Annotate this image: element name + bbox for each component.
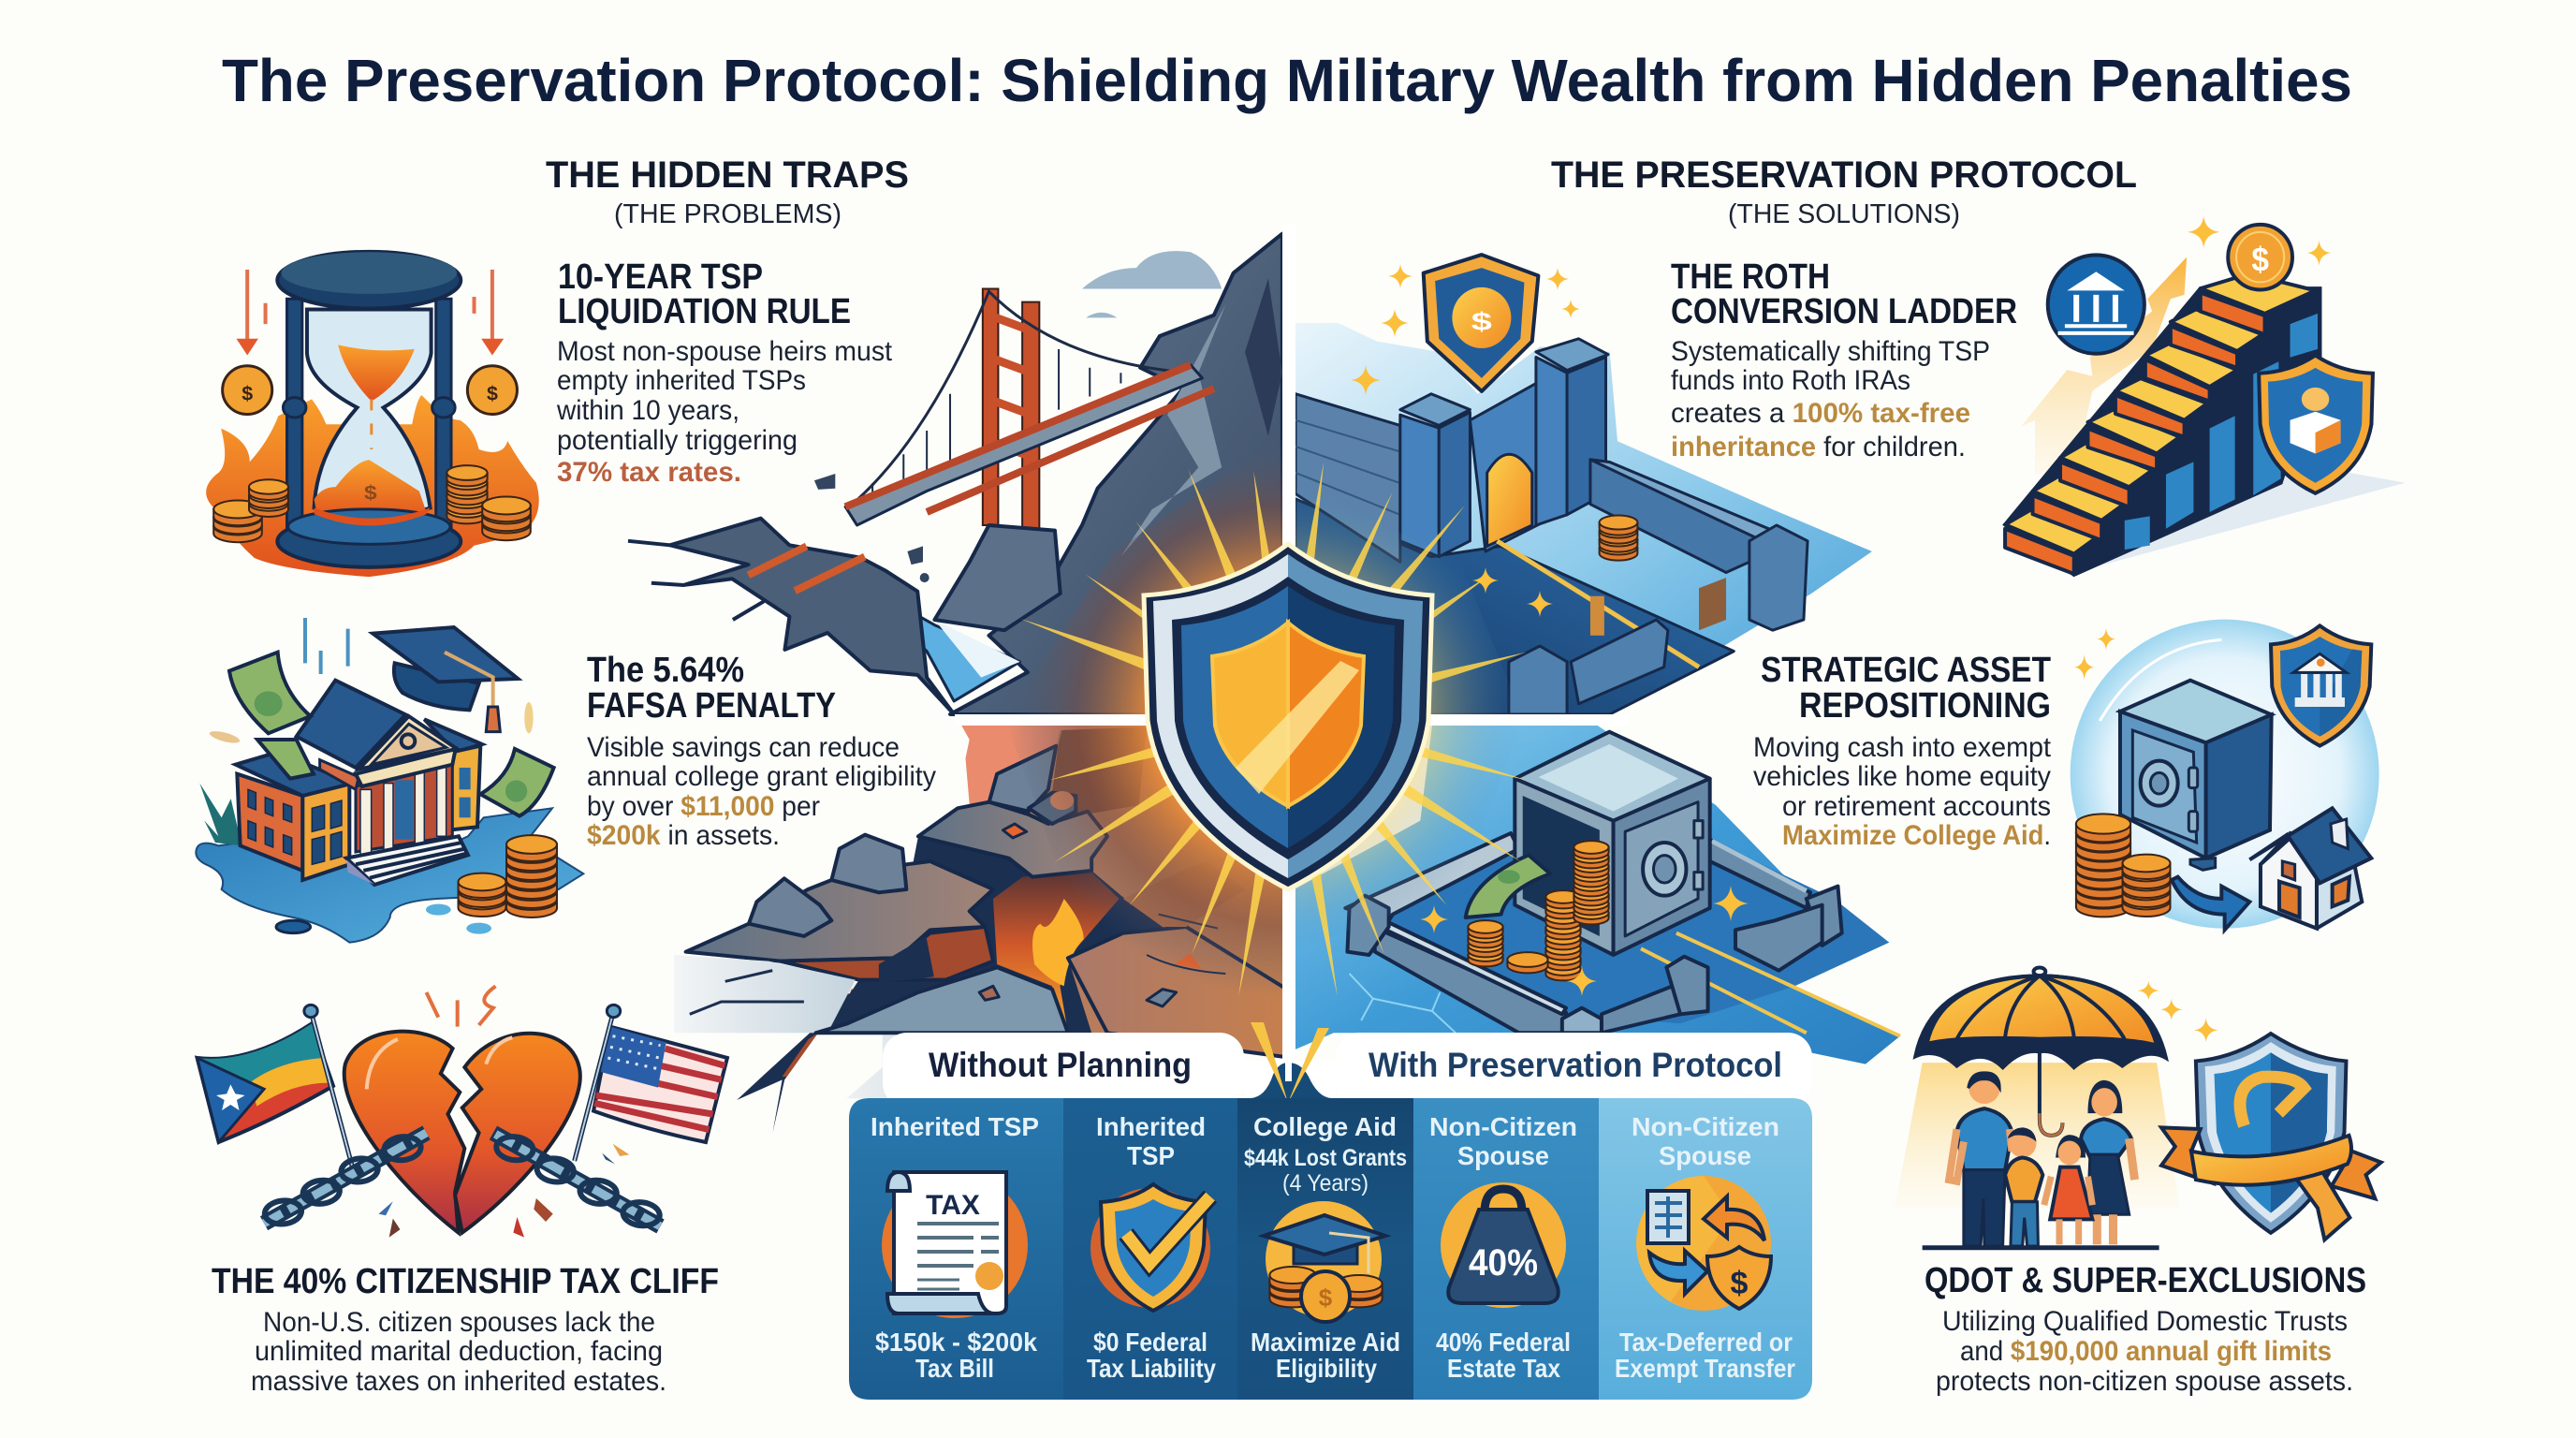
text: strategic asset repositioning: Moving cash into exempt	[1753, 732, 2052, 763]
panel: QDOT and super-exclusions	[1895, 967, 2381, 1397]
text: Roth conversion ladder: Systematically shifting TSP	[1671, 336, 1990, 367]
column 5: non-citizen spouse deferred transfer: Exempt Transfer	[1615, 1354, 1795, 1383]
column 3: college aid: Maximize Aid	[1251, 1328, 1400, 1357]
column 5: non-citizen spouse deferred transfer: Tax-Deferred or	[1619, 1328, 1793, 1357]
text: QDOT and super-exclusions	[1925, 1261, 2366, 1397]
column 4: non-citizen spouse estate tax: Spouse	[1457, 1141, 1549, 1170]
scene: vault in courtyard	[1290, 726, 1900, 1064]
column 4: non-citizen spouse estate tax: Estate Tax	[1447, 1354, 1560, 1383]
text: QDOT and super-exclusions: protects non-citizen spouse assets.	[1936, 1366, 2353, 1397]
icon: graduation cap and coins	[1264, 1201, 1385, 1322]
text: Roth conversion ladder: CONVERSION LADDER	[1671, 292, 2017, 331]
icon: family under umbrella and ribboned shield	[1895, 967, 2381, 1248]
tab: without planning: Without Planning	[929, 1046, 1192, 1084]
text: strategic asset repositioning: STRATEGIC ASSET	[1761, 651, 2051, 690]
column 3: college aid: Eligibility	[1276, 1354, 1377, 1383]
column 5: non-citizen spouse deferred transfer: Non-Citizen	[1632, 1112, 1779, 1141]
heading: the hidden traps	[546, 154, 909, 229]
panel: Roth conversion ladder	[1671, 216, 2405, 575]
column 4: non-citizen spouse estate tax	[1429, 1112, 1577, 1383]
column 2: inherited TSP protected: Tax Liability	[1087, 1354, 1216, 1383]
icon: transfer arrows with building and shield	[1636, 1176, 1771, 1311]
heading: the preservation protocol: THE PRESERVATION PROTOCOL	[1551, 154, 2137, 196]
text: 10-year rule: potentially triggering	[557, 425, 798, 456]
panel: comparison table	[849, 1011, 1812, 1400]
title: The Preservation Protocol: Shielding Military Wealth from Hidden Penalties	[222, 47, 2352, 114]
text: Roth conversion ladder	[1671, 257, 2017, 462]
central shield	[1144, 544, 1432, 889]
scene: crack tail and haze under the ground	[689, 983, 917, 1133]
text: strategic asset repositioning: or retirement accounts	[1782, 791, 2051, 822]
text: strategic asset repositioning: REPOSITIONING	[1799, 686, 2051, 726]
icon: 40 percent weight: 40%	[1469, 1242, 1538, 1284]
text: Roth conversion ladder: inheritance for children.	[1671, 432, 1966, 462]
icon: transfer arrows with building and shield: $	[1731, 1266, 1749, 1301]
text: Roth conversion ladder: funds into Roth IRAs	[1671, 365, 1910, 396]
connector notch with light burst	[1244, 1011, 1336, 1103]
heading: the hidden traps: THE HIDDEN TRAPS	[546, 154, 909, 196]
heading: the hidden traps: (THE PROBLEMS)	[614, 199, 842, 229]
icon: burning hourglass: $	[487, 382, 498, 404]
column 4: non-citizen spouse estate tax: Non-Citizen	[1429, 1112, 1577, 1141]
text: 10-year rule: within 10 years,	[556, 395, 739, 426]
column 4: non-citizen spouse estate tax: 40% Federal	[1436, 1328, 1571, 1357]
panel: 10-year TSP liquidation rule	[206, 252, 893, 577]
icon: burning hourglass: $	[242, 382, 253, 404]
text: 10-year rule	[556, 257, 893, 488]
icon: safe in bubble with shield, coins and house	[2071, 620, 2379, 930]
panel: strategic asset repositioning	[1753, 620, 2379, 930]
text: 10-year rule: 10-YEAR TSP	[558, 257, 763, 297]
text: strategic asset repositioning: vehicles like home equity	[1753, 761, 2051, 792]
icon: shield with check	[1090, 1184, 1210, 1311]
text: 10-year rule: empty inherited TSPs	[557, 365, 806, 396]
text: citizenship tax cliff	[212, 1262, 719, 1397]
icon: college in flood with cap and money	[196, 618, 583, 943]
panel: FAFSA penalty	[196, 618, 936, 943]
icon: staircase with bank and shield: $	[2251, 241, 2269, 279]
text: citizenship tax cliff: THE 40% CITIZENSHIP TAX CLIFF	[212, 1262, 719, 1301]
text: FAFSA penalty: Visible savings can reduce	[587, 732, 900, 763]
column 5: non-citizen spouse deferred transfer: Spouse	[1659, 1141, 1751, 1170]
column 3: college aid	[1244, 1112, 1407, 1383]
icon: broken heart, flags and chains	[198, 986, 727, 1238]
tab: without planning	[883, 1033, 1244, 1108]
scene: fortress with gate: $	[1471, 308, 1492, 336]
table columns	[849, 1098, 1812, 1400]
text: QDOT and super-exclusions: and $190,000 annual gift limits	[1960, 1336, 2332, 1367]
text: FAFSA penalty: FAFSA PENALTY	[587, 686, 836, 726]
scene: fortress with gate	[1295, 255, 1872, 714]
icon: tax scroll: TAX	[926, 1190, 980, 1221]
text: citizenship tax cliff: Non-U.S. citizen spouses lack the	[263, 1307, 655, 1338]
text: strategic asset repositioning	[1753, 651, 2052, 851]
icon: burning hourglass: $	[364, 481, 377, 504]
text: FAFSA penalty: $200k in assets.	[587, 820, 780, 851]
central illustration	[628, 225, 1900, 1133]
text: QDOT and super-exclusions: QDOT & SUPER-EXCLUSIONS	[1925, 1261, 2366, 1300]
tab: with preservation protocol	[1336, 1033, 1812, 1108]
column 3: college aid: (4 Years)	[1282, 1170, 1368, 1196]
column 2: inherited TSP protected: Inherited	[1096, 1112, 1206, 1141]
column 2: inherited TSP protected: $0 Federal	[1093, 1328, 1208, 1357]
icon: burning hourglass	[206, 252, 539, 577]
icon: 40 percent weight	[1441, 1182, 1566, 1308]
panel: 40% citizenship tax cliff	[198, 986, 727, 1397]
icon: coins in vault	[1420, 841, 1749, 996]
column 3: college aid: $44k Lost Grants	[1244, 1145, 1407, 1171]
rays around shield	[1017, 461, 1530, 998]
column 1: inherited TSP tax bill: Tax Bill	[915, 1354, 994, 1383]
column 3: college aid: College Aid	[1253, 1112, 1397, 1141]
icon: graduation cap and coins: $	[1319, 1284, 1333, 1312]
column 2: inherited TSP protected: TSP	[1127, 1141, 1175, 1170]
heading: the preservation protocol	[1551, 154, 2137, 229]
scene: cracked ground with lava	[674, 726, 1292, 1058]
icon: staircase with bank and shield	[2005, 216, 2405, 575]
icon: coin stacks around hourglass	[213, 465, 531, 542]
text: QDOT and super-exclusions: Utilizing Qualified Domestic Trusts	[1942, 1306, 2348, 1337]
text: FAFSA penalty	[587, 651, 936, 851]
text: citizenship tax cliff: unlimited marital deduction, facing	[255, 1336, 663, 1367]
text: Roth conversion ladder: creates a 100% tax-free	[1671, 398, 1970, 429]
column 1: inherited TSP tax bill	[871, 1112, 1039, 1383]
text: citizenship tax cliff: massive taxes on inherited estates.	[251, 1366, 666, 1397]
icon: tax scroll	[882, 1172, 1028, 1318]
column 1: inherited TSP tax bill: Inherited TSP	[871, 1112, 1039, 1141]
icon: coin stacks	[459, 835, 557, 917]
text: FAFSA penalty: by over $11,000 per	[587, 791, 820, 822]
tab: with preservation protocol: With Preservation Protocol	[1368, 1046, 1782, 1084]
icon: coins at fortress	[1351, 264, 1637, 617]
column 5: non-citizen spouse deferred transfer	[1615, 1112, 1795, 1383]
glow	[955, 225, 1629, 1067]
text: Roth conversion ladder: THE ROTH	[1671, 257, 1830, 297]
heading: the preservation protocol: (THE SOLUTIONS)	[1728, 199, 1960, 229]
text: strategic asset repositioning: Maximize College Aid.	[1782, 820, 2051, 851]
column 1: inherited TSP tax bill: $150k - $200k	[875, 1328, 1037, 1357]
text: 10-year rule: Most non-spouse heirs must	[557, 336, 893, 367]
icon: coin stacks beside safe	[2076, 814, 2170, 917]
scene: collapsing bridge	[628, 234, 1282, 714]
text: FAFSA penalty: annual college grant eligibility	[587, 761, 936, 792]
column 2: inherited TSP protected	[1087, 1112, 1216, 1383]
text: 10-year rule: 37% tax rates.	[557, 457, 741, 488]
text: 10-year rule: LIQUIDATION RULE	[558, 292, 851, 331]
text: FAFSA penalty: The 5.64%	[587, 651, 744, 690]
